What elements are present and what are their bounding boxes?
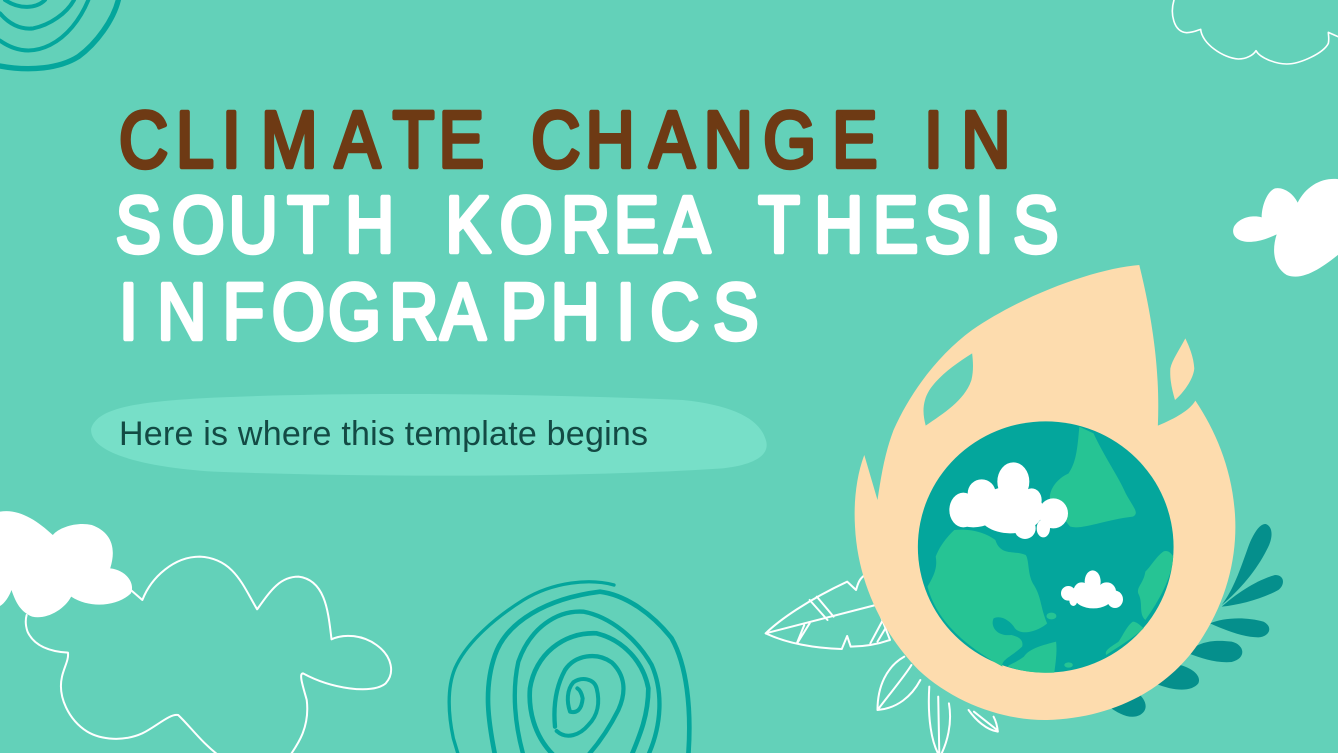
spiral: bottom centre (449, 582, 689, 753)
globe (918, 421, 1174, 673)
white outline leaves (766, 575, 998, 753)
teal leaves (1110, 524, 1283, 717)
title line 2: SOUTH KOREA THESIS (116, 180, 1059, 269)
title line 3: INFOGRAPHICS (119, 267, 759, 356)
illustration: burning earth (766, 265, 1235, 753)
title (116, 95, 1059, 356)
cloud: white right (1233, 179, 1338, 277)
cloud outline: bottom left (26, 557, 391, 753)
globe cloud: small (1061, 570, 1123, 608)
pill shape (91, 394, 767, 476)
globe cloud: large (949, 462, 1068, 539)
flame (855, 265, 1235, 720)
cloud outline: top right (1172, 0, 1338, 64)
title line 1: CLIMATE CHANGE IN (119, 95, 1010, 184)
cloud: white bottom left (0, 511, 132, 617)
spiral: top left (0, 0, 118, 69)
flame spark (1170, 338, 1194, 400)
subtitle pill (91, 394, 767, 476)
subtitle text: Here is where this template begins (119, 415, 648, 453)
